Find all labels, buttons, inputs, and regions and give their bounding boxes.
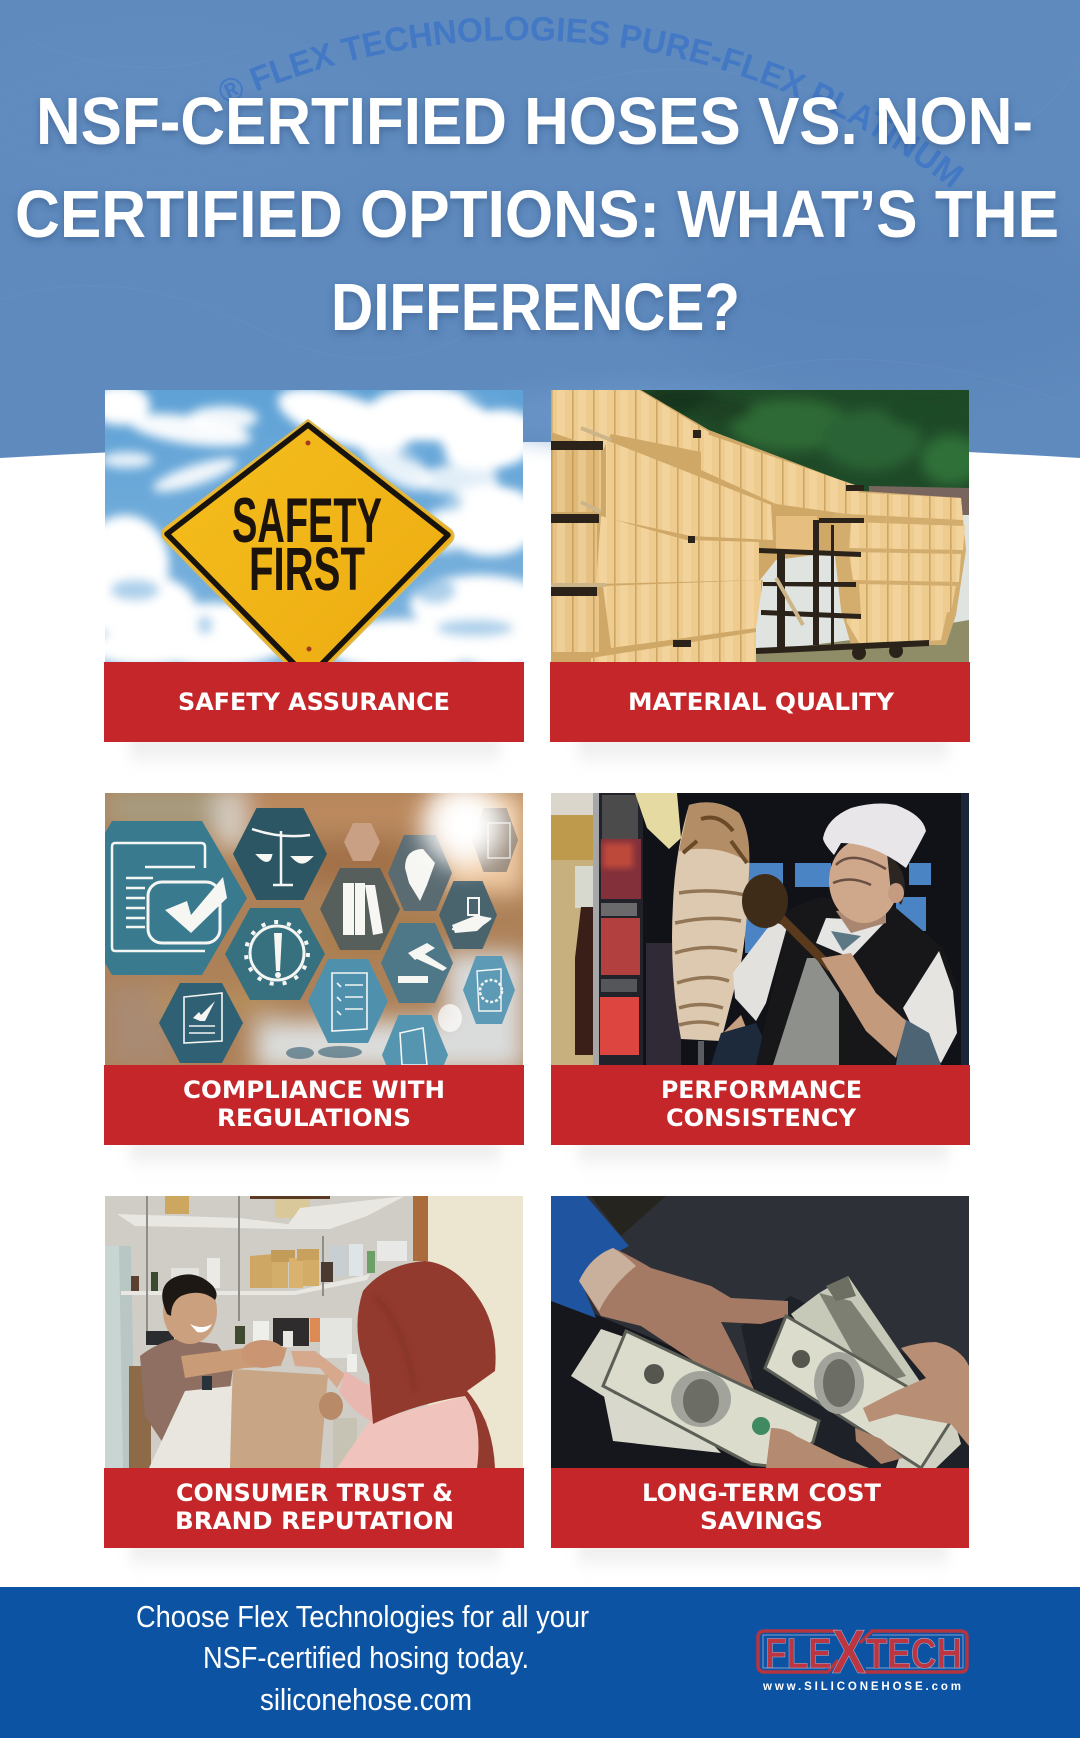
- boxes and products: [131, 1241, 407, 1468]
- upper hand: [579, 1248, 788, 1389]
- banknotes left: [571, 1329, 819, 1468]
- call to action text: [136, 1599, 589, 1717]
- label: COMPLIANCE WITH: [183, 1076, 445, 1104]
- logo: Flextech: X: [832, 1618, 866, 1687]
- footer: [0, 1587, 1080, 1738]
- paper bag: [229, 1369, 328, 1468]
- header background: [0, 0, 1080, 458]
- rack frame: [551, 430, 929, 660]
- label bar: [104, 662, 524, 742]
- label: PERFORMANCE: [661, 1076, 862, 1104]
- photo: hands exchanging dollar bills: [551, 1196, 969, 1468]
- photo: shopkeeper handing bag to customer: [105, 1196, 523, 1468]
- label: MATERIAL QUALITY: [628, 688, 895, 716]
- label: LONG-TERM COST: [642, 1479, 882, 1507]
- logo: Flextech: TECH: [866, 1630, 962, 1678]
- icon: diamond road sign: [162, 420, 454, 686]
- photo: rubber sheets drying on racks: [551, 386, 981, 662]
- call to action text: NSF-certified hosing today.: [203, 1640, 529, 1675]
- label bar: [550, 662, 970, 742]
- icon: diamond road sign: FIRST: [249, 535, 365, 603]
- label: CONSUMER TRUST &: [176, 1479, 453, 1507]
- lower hand: [766, 1428, 869, 1468]
- logo: Flextech: FLE: [765, 1630, 846, 1678]
- photo: safety first road sign against clouds: [105, 390, 523, 662]
- label: REGULATIONS: [217, 1104, 411, 1132]
- right hand: [863, 1342, 969, 1446]
- label bar: [551, 1468, 969, 1548]
- title: DIFFERENCE?: [331, 270, 740, 345]
- curved product text: ® FLEX TECHNOLOGIES PURE-FLEX PLATINUM: [219, 16, 964, 188]
- doner meat: [672, 802, 749, 1065]
- solid glyph shapes: [165, 849, 491, 1021]
- label: CONSISTENCY: [666, 1104, 857, 1132]
- label bar: [104, 1065, 524, 1145]
- call to action text: Choose Flex Technologies for all your: [136, 1599, 589, 1634]
- shopkeeper: [140, 1274, 343, 1468]
- logo: Flextech: [758, 1618, 967, 1693]
- panel: compliance with regulations: [104, 793, 524, 1161]
- label: BRAND REPUTATION: [175, 1507, 454, 1535]
- photo: compliance hexagon icons: [105, 793, 523, 1065]
- panel: safety assurance: [104, 390, 524, 758]
- blue sleeve: [551, 1196, 629, 1318]
- logo: Flextech: www.SILICONEHOSE.com: [762, 1681, 961, 1693]
- sheet rows: [551, 390, 965, 662]
- sheet backing: [551, 390, 861, 662]
- banknotes right: [765, 1276, 961, 1468]
- call to action text: siliconehose.com: [260, 1682, 472, 1717]
- label bar: [551, 1065, 970, 1145]
- panel: long-term cost savings: [551, 1196, 969, 1574]
- chef: [711, 804, 957, 1065]
- panel: material quality: [550, 386, 981, 772]
- icon: diamond road sign: SAFETY: [232, 486, 382, 556]
- label bar: [104, 1468, 524, 1548]
- label: SAVINGS: [700, 1507, 823, 1535]
- photo: chef slicing doner meat: [551, 793, 969, 1065]
- customer with red hijab: [291, 1261, 496, 1468]
- panel: consumer trust and brand reputation: [104, 1196, 524, 1574]
- rack poles: [551, 428, 803, 625]
- label: SAFETY ASSURANCE: [178, 688, 450, 716]
- hexagons: [105, 808, 518, 1065]
- shelves: [117, 1196, 405, 1295]
- hexagon glyphs: [112, 823, 510, 1065]
- title: [15, 84, 1059, 345]
- panel: performance consistency: [551, 793, 970, 1175]
